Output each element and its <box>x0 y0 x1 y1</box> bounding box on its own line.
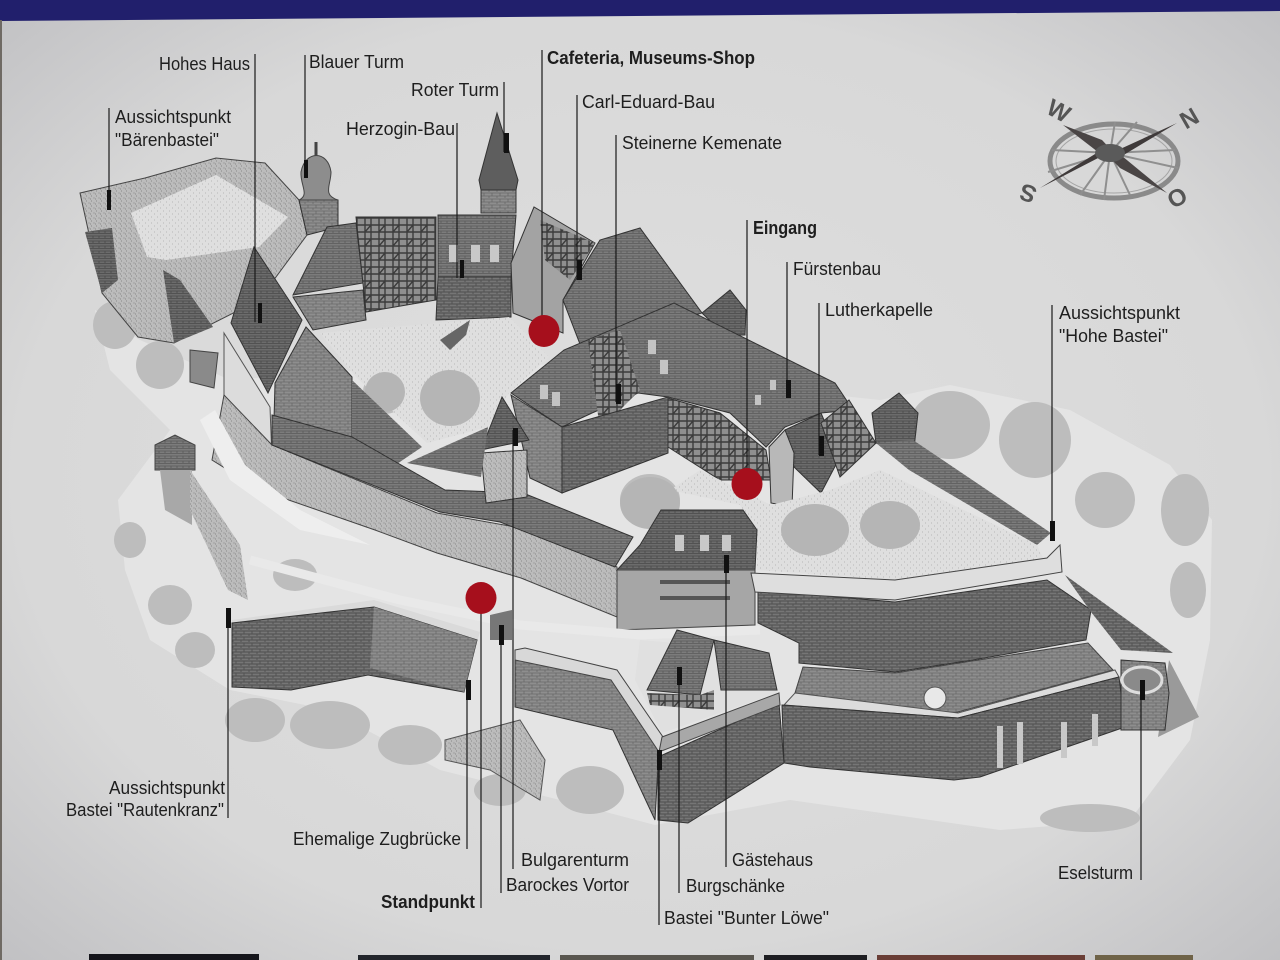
Blauer Turm <box>299 142 338 235</box>
Carl-Eduard-Bau <box>511 207 595 333</box>
labels: Standpunkt <box>381 892 475 912</box>
west small roof <box>190 350 218 388</box>
Bärenbastei <box>80 158 307 343</box>
labels: Bulgarenturm <box>521 850 629 870</box>
labels: Fürstenbau <box>793 259 881 279</box>
labels: Aussichtspunkt <box>115 107 231 127</box>
trees <box>93 301 1209 832</box>
icon: compass rose: O <box>1163 182 1192 215</box>
red marker: standpoint <box>466 582 496 614</box>
red marker: entrance <box>732 468 762 500</box>
icon: compass rose <box>1016 94 1204 215</box>
timber facade of Carl-Eduard-Bau <box>540 220 595 280</box>
Bastei top parapet right <box>659 693 780 752</box>
labels: Carl-Eduard-Bau <box>582 92 715 112</box>
Lutherkapelle <box>769 400 876 507</box>
small gable roof <box>702 290 746 335</box>
labels: Eingang <box>753 218 817 238</box>
hillside and lawn <box>95 310 1212 830</box>
north wing roof <box>293 223 363 295</box>
top blue band <box>0 0 1280 21</box>
Bastei Rautenkranz wall <box>232 607 477 692</box>
icon: compass rose: W <box>1042 94 1075 129</box>
left wall of main block <box>511 395 562 493</box>
white tower wall <box>224 333 272 460</box>
labels: Bastei "Bunter Löwe" <box>664 908 829 928</box>
Bastei Bunter Löwe right wall <box>658 703 784 823</box>
east bastion upper wall <box>758 580 1091 672</box>
labels: Steinerne Kemenate <box>622 133 782 153</box>
Rautenkranz top strip <box>232 600 480 642</box>
leader line end markers <box>107 133 1145 770</box>
Herzogin-Bau roof and wall <box>436 215 516 320</box>
icon: compass rose: N <box>1175 103 1204 135</box>
red marker: cafeteria <box>528 315 560 347</box>
leader lines <box>109 50 1141 925</box>
labels: Roter Turm <box>411 80 499 100</box>
icon: compass rose: S <box>1016 177 1040 208</box>
labels: Hohes Haus <box>159 54 250 74</box>
labels: Barockes Vortor <box>506 875 629 895</box>
garden trees <box>620 477 920 556</box>
buttresses <box>997 714 1098 768</box>
north wing lower wall <box>293 290 366 330</box>
Fürstenbau half timber <box>668 398 771 480</box>
dormers <box>540 340 776 406</box>
labels <box>66 48 1180 928</box>
Burgschänke <box>647 630 777 710</box>
mid roof band <box>272 415 633 567</box>
Bastei parapet <box>515 648 663 752</box>
west dark house <box>163 270 213 343</box>
bastion dark tower <box>85 228 118 293</box>
north wing open timber section <box>356 217 436 312</box>
wall lighter face <box>370 607 477 692</box>
east parapet <box>751 545 1062 600</box>
labels: Ehemalige Zugbrücke <box>293 829 461 849</box>
Gästehaus <box>617 510 757 630</box>
upper courtyard <box>320 317 549 443</box>
long curtain wall west <box>212 395 617 617</box>
labels: "Bärenbastei" <box>115 130 219 150</box>
white flower band <box>200 410 370 545</box>
second east wall <box>795 643 1113 713</box>
Steinerne Kemenate timber <box>588 330 640 430</box>
labels: Gästehaus <box>732 850 813 870</box>
east diagonal wall <box>876 440 1051 545</box>
east tower <box>872 393 918 457</box>
Bastei Bunter Löwe left wall <box>515 657 659 820</box>
west outer tower <box>155 435 195 525</box>
entrance yard and garden <box>670 470 1047 580</box>
Vortor <box>490 610 512 640</box>
labels: Herzogin-Bau <box>346 119 455 139</box>
west outer wall <box>190 470 248 600</box>
Burgschänke yard <box>635 640 777 733</box>
castle illustration <box>80 113 1212 832</box>
courtyard ramp <box>440 320 470 350</box>
Eselsturm shadow <box>1158 660 1199 737</box>
labels: Lutherkapelle <box>825 300 933 320</box>
labels: Aussichtspunkt <box>109 778 225 798</box>
bridge and gate <box>445 720 545 800</box>
roof left of tower <box>407 427 488 477</box>
bottom photo strip <box>89 954 1193 960</box>
Roter Turm <box>479 113 518 213</box>
labels: Aussichtspunkt <box>1059 303 1180 323</box>
labels: Burgschänke <box>686 876 785 896</box>
labels: Blauer Turm <box>309 52 404 72</box>
labels: Cafeteria, Museums-Shop <box>547 48 755 68</box>
lion head <box>924 687 946 709</box>
Eselsturm <box>1121 660 1169 730</box>
inner yard of bastion <box>131 175 288 260</box>
east dark band <box>1065 575 1173 653</box>
lower outer wall <box>782 677 1125 780</box>
labels: Eselsturm <box>1058 863 1133 883</box>
roof behind central building <box>563 228 702 370</box>
Bulgarenturm <box>481 397 529 503</box>
Hohes Haus roof <box>231 247 302 393</box>
main central roofs <box>511 303 853 447</box>
labels: "Hohe Bastei" <box>1059 326 1168 346</box>
left board edge <box>0 20 2 960</box>
road below curtain wall <box>250 560 760 635</box>
main block wall <box>562 397 668 493</box>
bank below gable <box>274 380 422 470</box>
courtyard trees <box>365 370 480 426</box>
Hohes Haus gable facade <box>274 327 352 437</box>
labels: Bastei "Rautenkranz" <box>66 800 224 820</box>
east walkway <box>784 670 1119 718</box>
